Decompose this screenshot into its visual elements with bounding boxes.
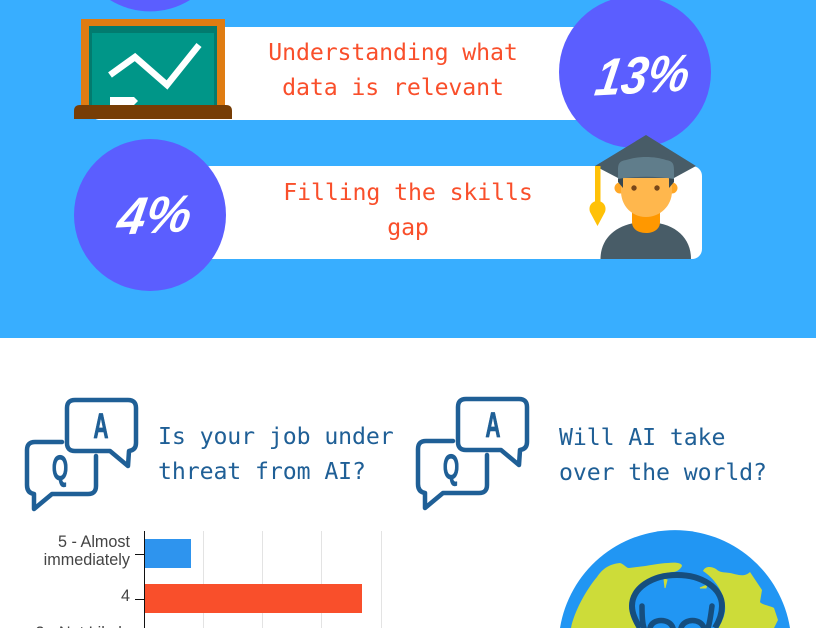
axis labels: 4 [121,587,130,605]
heading: world question: over the world? [559,459,767,486]
bar: 5 almost immediately [145,539,191,568]
icon: Q and A speech bubbles: A [485,407,501,445]
bar chart: job threat [36,531,382,628]
heading: world question: Will AI take [559,424,725,451]
card text: Filling the skills [283,179,533,206]
bar: 4 [145,584,362,613]
axis labels: immediately [44,551,131,569]
card: skills gap [200,166,702,259]
circle: 4 percent: 4% [112,185,196,247]
icon: Q and A speech bubbles [418,399,527,508]
icon: Q and A speech bubbles: Q [52,450,68,488]
panel: world question [418,399,767,508]
heading: job question: threat from AI? [158,458,366,485]
previous percentage circle [110,0,190,11]
panel: job threat question [27,400,394,509]
card text: Understanding what [268,39,518,66]
illustration: globe with head outline [560,530,790,628]
icon: Q and A speech bubbles: Q [443,449,459,487]
icon: chalkboard with line chart [74,19,232,119]
card text: gap [387,214,429,241]
axis labels: 5 - Almost [58,533,130,551]
card: relevant data [90,27,590,120]
circle: 13 percent [559,0,711,148]
panel: blue challenges section [0,0,816,338]
circle: 13 percent: 13% [591,43,694,107]
icon: Q and A speech bubbles [27,400,136,509]
icon: graduate [589,135,696,259]
card text: data is relevant [282,74,504,101]
icon: Q and A speech bubbles: A [93,408,109,446]
circle: 4 percent [74,139,226,291]
heading: job question: Is your job under [158,423,394,450]
